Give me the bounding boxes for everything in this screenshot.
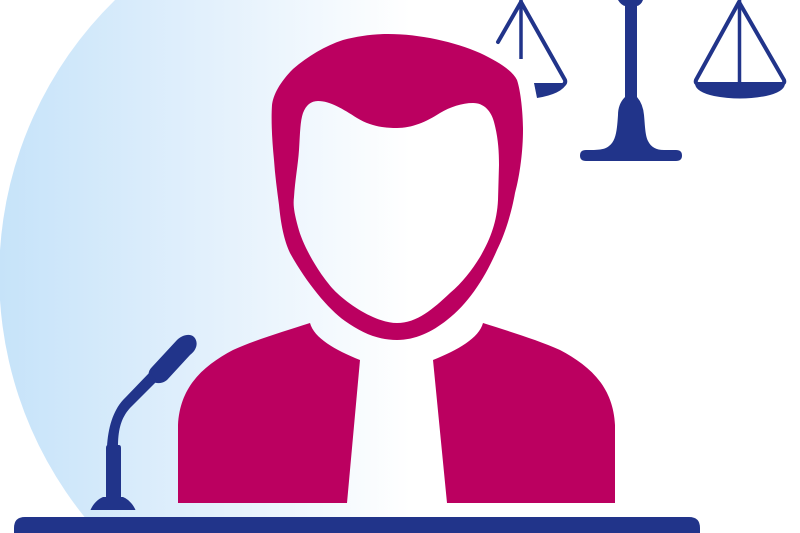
microphone head — [149, 335, 197, 383]
person: right shoulder — [433, 323, 615, 503]
icon: scales of justice — [498, 0, 785, 161]
podium bar — [14, 517, 700, 533]
scales left pan — [498, 0, 567, 98]
scales right pan — [695, 0, 785, 98]
microphone stem — [107, 372, 157, 447]
microphone stand — [90, 445, 136, 510]
icon: microphone — [90, 335, 197, 510]
person: hair and face outline — [272, 34, 523, 340]
background circle — [0, 0, 410, 520]
person: left shoulder — [178, 323, 360, 503]
scales centre post — [580, 0, 682, 161]
